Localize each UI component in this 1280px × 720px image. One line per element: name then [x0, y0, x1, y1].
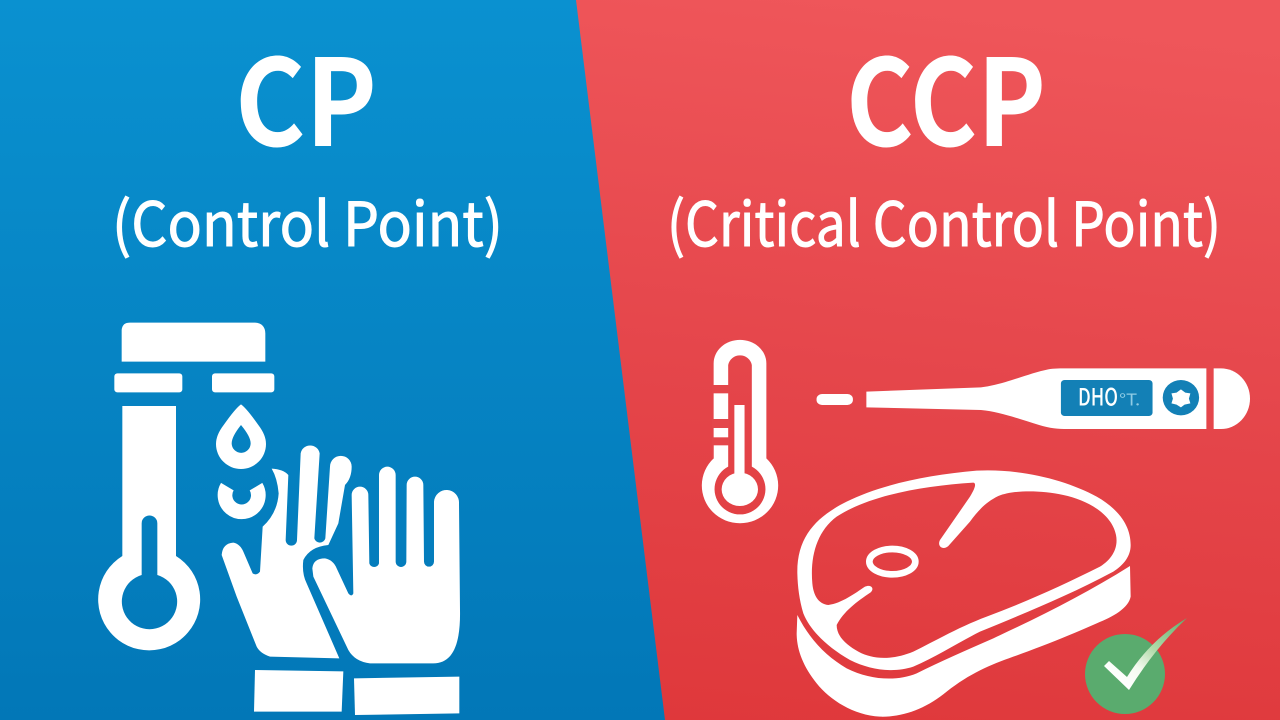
- steak bone ring: [869, 549, 915, 574]
- icon: red panel thermometer: [702, 340, 778, 523]
- heading: CCP: CCP: [846, 7, 1046, 181]
- probe tip: [817, 394, 853, 405]
- thermometer gaps: [712, 385, 729, 459]
- icon: green check badge: [1085, 618, 1187, 714]
- display screen: [1061, 380, 1153, 416]
- heading: CP: CP: [235, 7, 377, 181]
- thermometer outline: [702, 340, 778, 523]
- icon part: faucet head: [122, 323, 265, 362]
- icon part: left hand: [222, 445, 352, 658]
- icon part: glove cuffs: [254, 670, 459, 715]
- check mark: [1104, 618, 1187, 690]
- badge circle: [1085, 634, 1165, 714]
- thermometer core: [722, 405, 758, 506]
- icon: steak: [797, 470, 1131, 717]
- steak side band: [797, 566, 1131, 717]
- display reading: DHO: [1078, 379, 1118, 413]
- icon part: water drop: [216, 404, 266, 469]
- power button: [1163, 380, 1199, 415]
- icon part: broken water ring: [225, 487, 258, 512]
- icon part: right hand: [312, 467, 460, 663]
- icon: digital thermometer: [817, 368, 1250, 429]
- steak top with fat outline: [797, 470, 1131, 670]
- icon part: thermometer stem: [98, 406, 200, 650]
- panel: CP blue background: [0, 0, 665, 720]
- icon: faucet thermometer, water drops and hands: [98, 323, 460, 715]
- icon part: faucet collar: [114, 373, 274, 392]
- probe body: [866, 368, 1206, 429]
- display reading: °T.: [1119, 387, 1140, 410]
- end cap: [1214, 368, 1250, 429]
- subheading: Control Point: (Control Point): [112, 175, 503, 264]
